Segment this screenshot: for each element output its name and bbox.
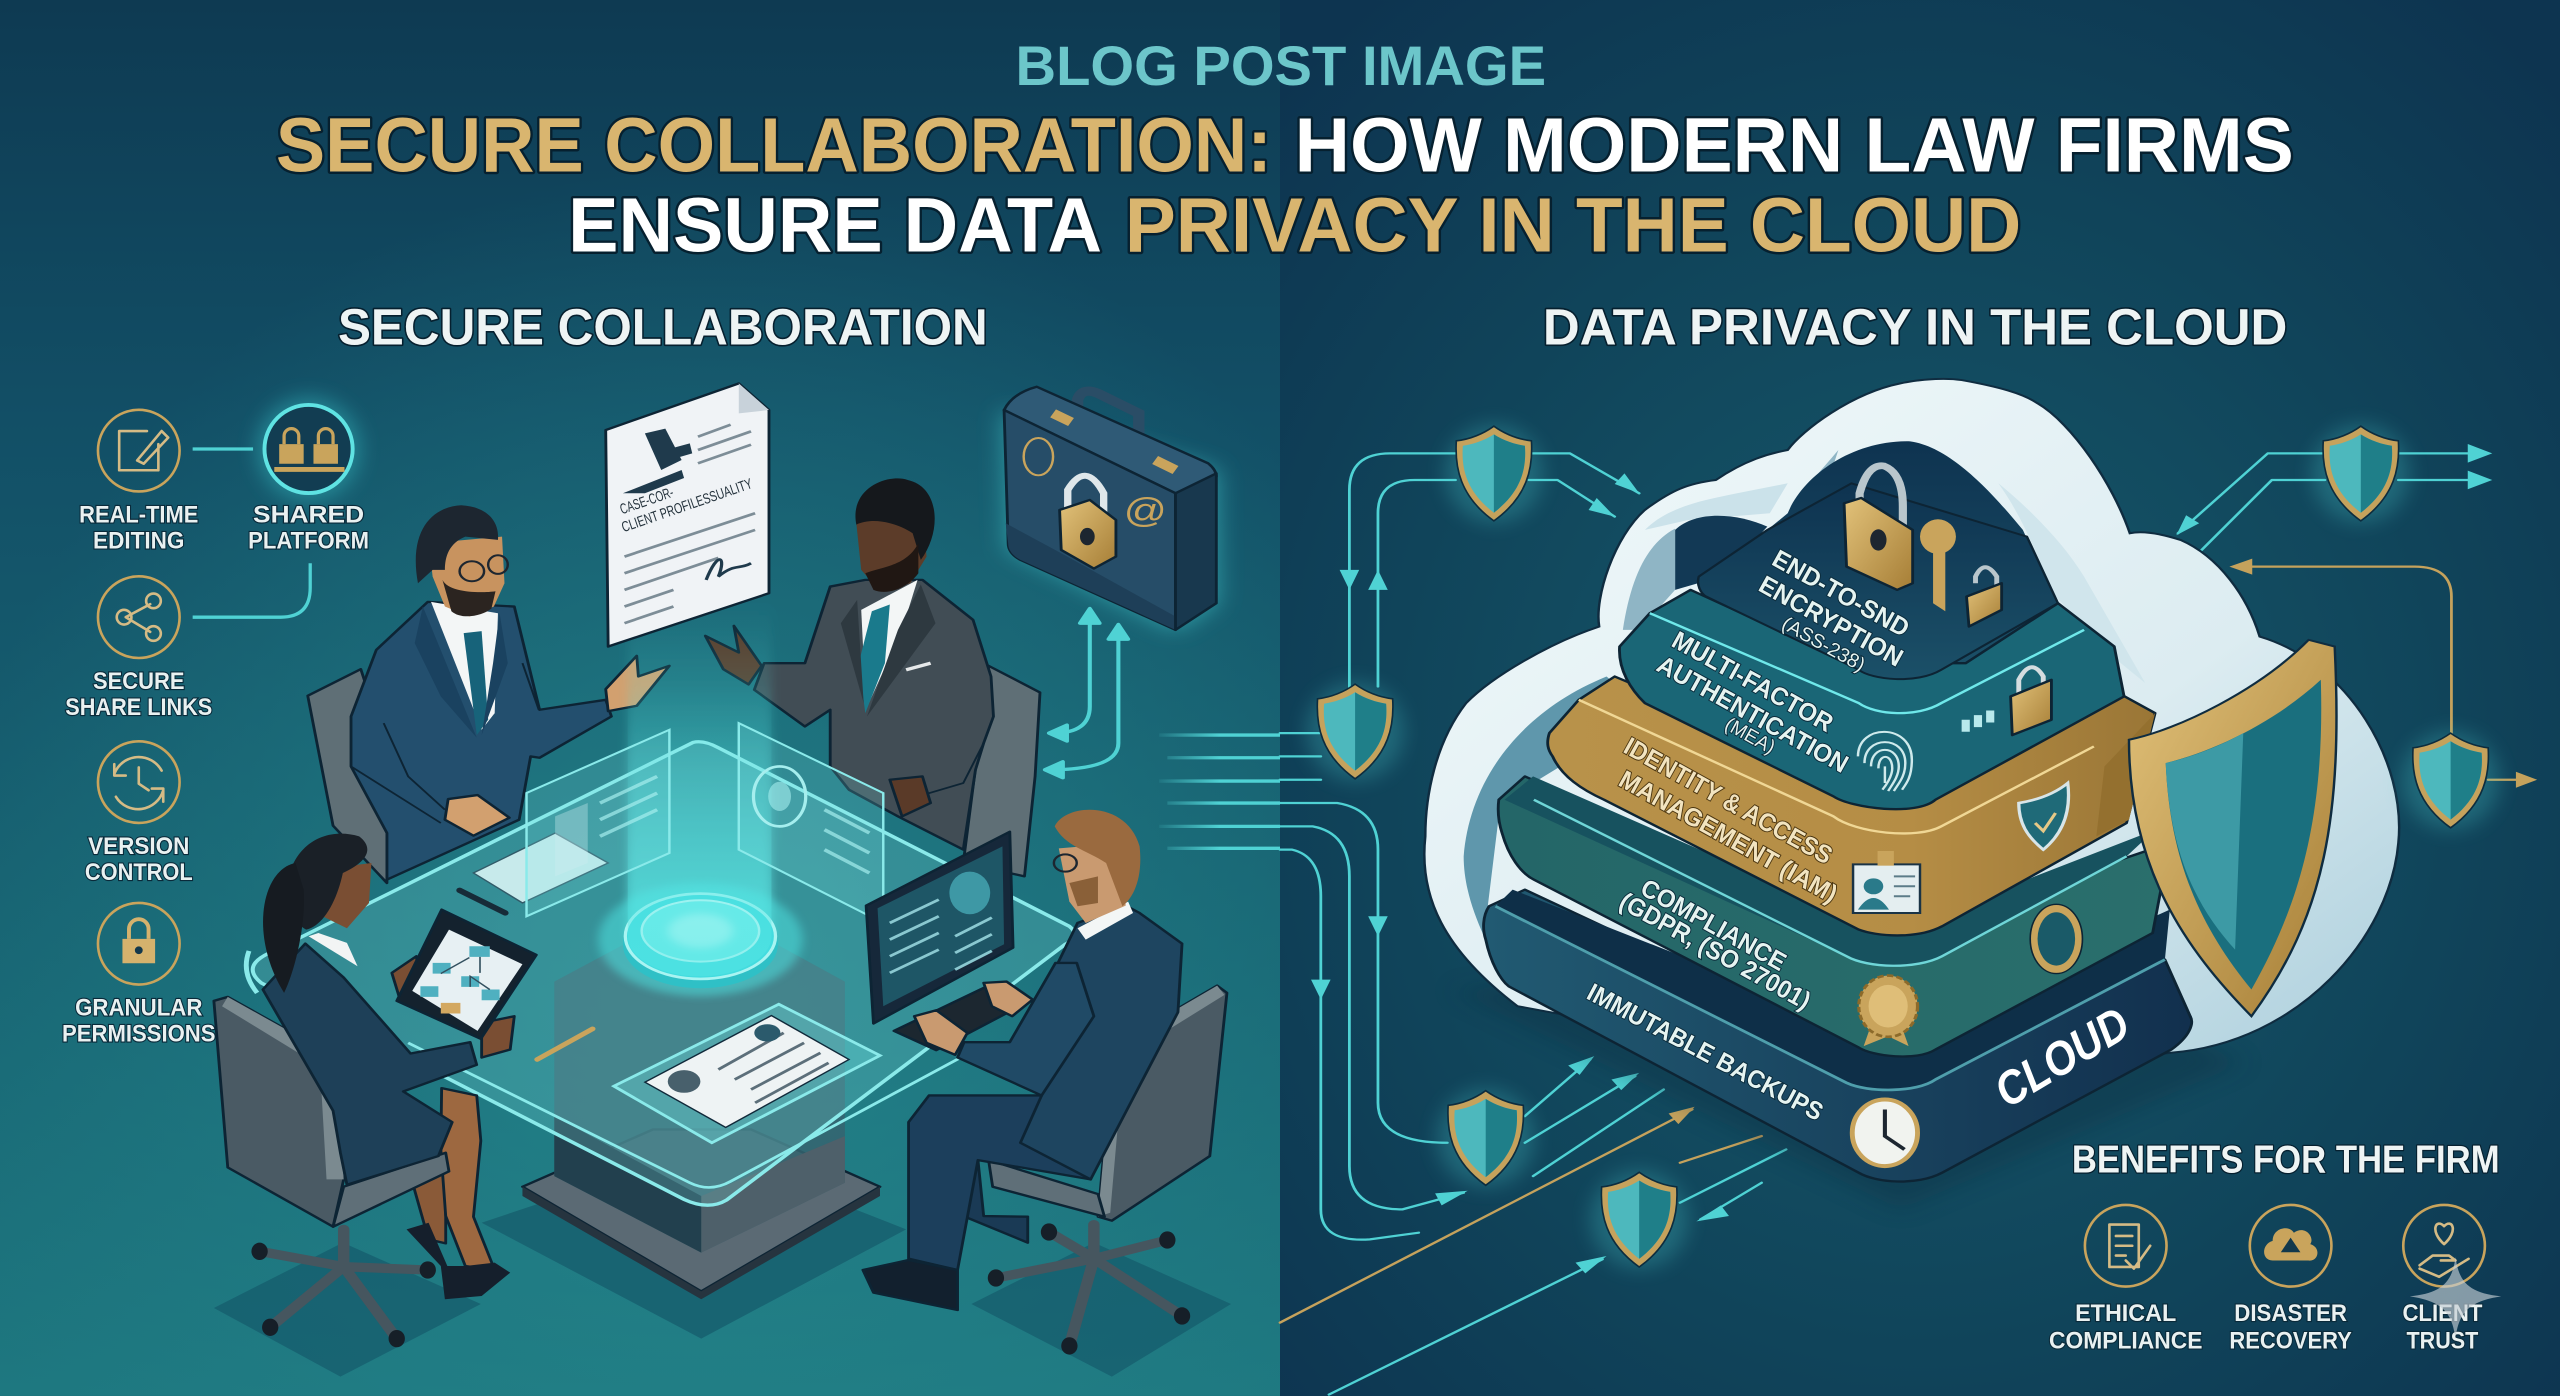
table pedestal [522, 903, 880, 1299]
label: immutable backups: IMMUTABLE BACKUPS [1582, 979, 1828, 1127]
holographic screen: right [739, 723, 883, 923]
benefit: ethical compliance [2049, 1205, 2202, 1355]
feature: shared platform [248, 397, 369, 555]
feature: secure share links: SECURE [93, 669, 184, 695]
title: HOW MODERN LAW FIRMS [1295, 103, 2294, 188]
feature: shared platform: SHARED [253, 502, 364, 528]
hologram beam [628, 603, 771, 936]
feature: real-time editing [79, 410, 198, 555]
benefits panel [2049, 1138, 2500, 1355]
connector lines [193, 449, 310, 617]
person: seated man at keyboard [863, 810, 1227, 1355]
glass table top [253, 742, 1075, 1205]
feature: granular permissions [62, 903, 216, 1048]
document on table: right [614, 1004, 880, 1143]
eyebrow: blog post image: BLOG POST IMAGE [1016, 35, 1546, 97]
heading: data privacy in the cloud: DATA PRIVACY IN THE CLOUD [1543, 299, 2287, 356]
title: SECURE COLLABORATION: [276, 103, 1272, 188]
monitor [866, 832, 1024, 1050]
feature list [62, 397, 369, 1048]
person: seated woman [214, 834, 514, 1347]
benefit: ethical compliance: COMPLIANCE [2049, 1329, 2202, 1355]
benefits heading: BENEFITS FOR THE FIRM [2072, 1138, 2500, 1181]
icon: key [1920, 519, 1956, 611]
feature: shared platform: PLATFORM [248, 529, 369, 555]
floating document text [618, 476, 755, 536]
icon: compliance seal [2030, 904, 2082, 974]
shields on data flow [1306, 425, 2500, 1269]
shield: left [1306, 682, 1404, 780]
icon: clock [1852, 1099, 1918, 1166]
person: man in grey suit [705, 478, 993, 850]
chair: back right [963, 666, 1040, 876]
label: multi-factor authentication: AUTHENTICATION [1652, 651, 1853, 779]
icon: check shield on IAM layer [2019, 783, 2069, 850]
label: multi-factor authentication: MULTI-FACTOR [1667, 626, 1838, 738]
layer: multi-factor authentication [1619, 590, 2124, 809]
benefit: disaster recovery: DISASTER [2234, 1301, 2347, 1327]
background: left panel [0, 0, 1280, 1396]
feature: version control: VERSION [88, 834, 189, 860]
benefit: disaster recovery: RECOVERY [2229, 1329, 2352, 1355]
title: PRIVACY IN THE CLOUD [1125, 183, 2021, 268]
icon: ID card [1853, 851, 1920, 913]
layer: identity and access management [1548, 676, 2155, 935]
watermark sparkle [2410, 1257, 2501, 1339]
title [276, 103, 2294, 268]
label: end-to-end encryption: END-TO-SND [1767, 545, 1914, 643]
shield: top left [1445, 425, 1543, 522]
feature: granular permissions: GRANULAR [75, 996, 202, 1022]
layer: immutable backups [1484, 890, 2192, 1182]
benefit: disaster recovery [2229, 1205, 2352, 1355]
feature: version control: CONTROL [85, 860, 193, 886]
heading: secure collaboration: SECURE COLLABORATION [338, 299, 988, 356]
holographic screen: left [527, 730, 669, 916]
background: right panel [1280, 0, 2560, 1396]
layer: end-to-end encryption [1698, 483, 2058, 679]
document on table: left [473, 833, 608, 903]
layer labels [1582, 545, 2139, 1127]
data streams to cloud [1159, 735, 1280, 848]
pen: dark [460, 890, 505, 913]
arrows: briefcase links [1045, 609, 1128, 778]
tablet [397, 910, 536, 1039]
floating document text: CASE-COR- [618, 485, 676, 518]
label: identity and access management: MANAGEMENT (IAM) [1614, 766, 1842, 909]
icon: fingerprint [1858, 732, 1912, 791]
label: compliance: COMPLIANCE [1636, 874, 1791, 977]
feature: secure share links [65, 576, 212, 721]
title: ENSURE DATA [568, 183, 1102, 268]
shield: bottom [1590, 1171, 1688, 1269]
briefcase [1004, 387, 1216, 630]
label: end-to-end encryption: (ASS-238) [1778, 613, 1869, 676]
shield: right [2402, 731, 2500, 829]
label: identity and access management: IDENTITY & ACCESS [1619, 732, 1837, 870]
shield: top right [2312, 425, 2410, 522]
panel: collaboration scene [214, 383, 1280, 1377]
benefit: ethical compliance: ETHICAL [2075, 1301, 2176, 1327]
icon: small padlock [1967, 567, 2002, 627]
feature: secure share links: SHARE LINKS [65, 695, 212, 721]
large shield [2129, 640, 2337, 1016]
briefcase: @ [1124, 492, 1167, 530]
benefit: client trust: TRUST [2407, 1329, 2479, 1355]
feature: granular permissions: PERMISSIONS [62, 1022, 216, 1048]
label: end-to-end encryption: ENCRYPTION [1754, 571, 1908, 673]
icon: rosette [1859, 976, 1918, 1046]
label: cloud: CLOUD [1986, 997, 2139, 1118]
label: multi-factor authentication: (MEA) [1721, 713, 1779, 759]
panel: cloud data privacy [1280, 379, 2537, 1395]
icon: access code dots [1962, 710, 1994, 732]
cloud [1424, 379, 2399, 1209]
icon: padlock on MFA layer [2011, 667, 2051, 735]
floating document [606, 383, 769, 647]
benefit: client trust [2402, 1205, 2485, 1355]
hologram disc [598, 683, 802, 996]
shield: lower left [1437, 1089, 1535, 1187]
feature: real-time editing: EDITING [93, 529, 184, 555]
chair: back left [308, 669, 387, 883]
layer: compliance [1498, 776, 2170, 1056]
benefit: client trust: CLIENT [2402, 1301, 2483, 1327]
feature: version control [85, 741, 193, 886]
floating document text: CLIENT PROFILESSUALITY [620, 476, 755, 536]
pen [537, 1029, 593, 1060]
feature: real-time editing: REAL-TIME [79, 502, 198, 528]
floor shadows [214, 1149, 1231, 1377]
icon: large padlock [1844, 466, 1913, 590]
arrows: data flow [1280, 444, 2537, 1395]
label: compliance: (GDPR, (SO 27001) [1615, 887, 1815, 1016]
person: man with glasses [351, 505, 669, 880]
